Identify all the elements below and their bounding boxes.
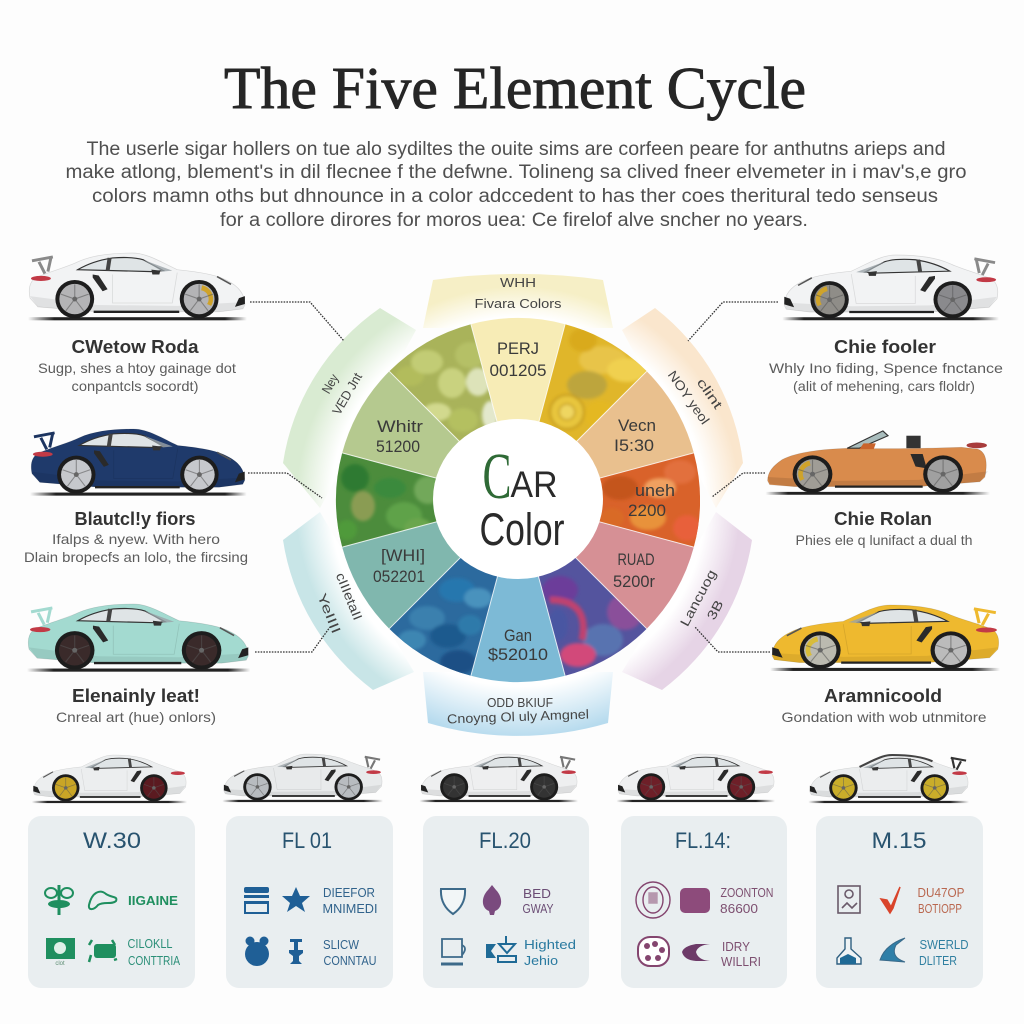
item text: CONNTAU [324, 953, 376, 968]
outer ring labels: 3B [704, 598, 726, 622]
panel: FL.20 [423, 816, 589, 988]
hub label: Color: Color [480, 504, 565, 555]
car: white left [28, 253, 247, 320]
wheel segment labels: Vecn [618, 416, 656, 435]
left label 2: Dlain bropecfs an lolo, the fircsing [24, 549, 248, 565]
right label 2: Phies ele q lunifact a dual th [796, 532, 972, 548]
leader lines [248, 302, 778, 652]
icon: mouse face [245, 936, 269, 966]
outer ring labels: VED Jnt [329, 370, 365, 417]
item text: CONTTRIA [128, 953, 180, 968]
left label 3: Cnreal art (hue) onlors) [56, 709, 216, 725]
item text: GWAY [522, 901, 554, 916]
panel heading: FL 01 [282, 828, 332, 853]
icon: stack [244, 887, 269, 914]
car: yellow right [770, 605, 1000, 671]
car: white right [782, 255, 999, 320]
icon: badge: clot [55, 961, 65, 967]
item text: BED [523, 886, 551, 901]
icon: patterned disc [638, 937, 669, 966]
bottom car 4 [617, 754, 775, 802]
arc band: upper right [622, 308, 743, 508]
wheel segment labels: uneh [635, 481, 675, 500]
intro paragraph [66, 139, 966, 231]
color wheel [335, 310, 701, 685]
panel: FL 01 [226, 816, 393, 988]
segment: light blue [471, 500, 565, 682]
outer ring labels: Lancuog [677, 567, 719, 629]
panel heading: W.30 [83, 828, 141, 853]
intro paragraph: The userle sigar hollers on tue alo sydiltes the ouite sims are corfeen peare for anthutns arieps and [86, 139, 946, 160]
wheel segment labels [373, 339, 675, 664]
right label 3 [782, 686, 987, 725]
bottom car 2 [222, 754, 383, 802]
item text [322, 885, 378, 916]
item text [721, 939, 761, 969]
icon: blue tray [486, 936, 516, 962]
icon: badge [46, 938, 75, 967]
item text [522, 886, 554, 916]
center hub [433, 419, 603, 579]
item text: DIEEFOR [323, 885, 375, 900]
left label 2 [24, 509, 248, 565]
left label 1: Sugp, shes a htoy gainage dot [38, 360, 236, 376]
wheel segment labels: 001205 [490, 361, 546, 380]
item text: SWERLD [920, 937, 968, 952]
outer ring labels: Fivara Colors [474, 296, 562, 311]
panel heading: FL.14: [675, 828, 731, 853]
intro paragraph: for a collore dirores for moros uea: Ce firelof alve sncher no years. [220, 210, 808, 231]
icon: pin [289, 939, 303, 964]
segment: pale yellow [471, 318, 565, 500]
wheel segment labels: 052201 [373, 567, 425, 586]
outer ring labels: ODD BKIUF [487, 695, 553, 710]
wheel segment labels: 51200 [376, 437, 420, 456]
icon: filled tile [680, 888, 710, 913]
left label 1: CWetow Roda [72, 337, 200, 357]
left label 1 [38, 337, 236, 394]
item text: CILOKLL [128, 936, 172, 951]
segment: purple texture [538, 558, 647, 676]
right label 1 [769, 337, 1003, 394]
wheel segment labels: [WHI] [381, 546, 425, 565]
item text [919, 937, 968, 968]
item text: SLICW [323, 937, 360, 952]
outer ring labels: YeIIII [314, 591, 344, 636]
bottom car 3 [420, 754, 578, 802]
item text: DU47OP [918, 885, 964, 900]
segment: yellow texture [539, 324, 647, 441]
arc band: lower left [283, 512, 414, 690]
panel: FL.14: [621, 816, 787, 988]
icon: round seal [636, 882, 670, 918]
arc band: bottom [423, 672, 613, 736]
left label 3: Elenainly leat! [72, 686, 200, 706]
item text: WILLRI [721, 954, 761, 969]
icon: star [282, 887, 310, 912]
icon: shield [441, 889, 465, 914]
wheel segment labels: Whitr [377, 417, 423, 436]
left label 2: Ifalps & nyew. With hero [52, 531, 220, 547]
item text [128, 936, 180, 968]
arc band: lower right [622, 512, 752, 690]
icon: red check [881, 887, 900, 913]
hub letter: green C: C [482, 440, 512, 513]
bottom car 5 [808, 755, 969, 803]
segment: tan [518, 371, 694, 500]
left label 1: conpantcls socordt) [72, 378, 198, 394]
icon: bracket cluster [89, 940, 117, 962]
intro paragraph: make atlong, blement's in dil flecnee f the defwne. Tolineng sa clived fneer elvemeter in i mav's,e gro [66, 162, 966, 183]
icon: cup [441, 939, 465, 964]
icon: swoosh [880, 938, 905, 962]
hub letters: AR: AR [510, 464, 558, 505]
car: mint left [27, 604, 250, 672]
icon: outlined square [838, 886, 860, 913]
right label 3: Aramnicoold [824, 686, 942, 706]
outer ring labels [314, 275, 726, 726]
segment separators [342, 324, 694, 676]
right label 1: Whly Ino fiding, Spence fnctance [769, 360, 1003, 376]
segment: sage [342, 371, 518, 500]
segment: blue texture [389, 558, 498, 676]
right label 3: Gondation with wob utnmitore [782, 709, 987, 725]
panel: W.30 [28, 816, 195, 988]
item text [323, 937, 376, 968]
right label 2 [796, 509, 972, 548]
item text [524, 937, 576, 968]
right label 1: Chie fooler [834, 337, 936, 357]
panel heading: FL.20 [479, 828, 531, 853]
icon: double C [682, 944, 710, 961]
left label 2: Blautcl!y fiors [74, 509, 196, 529]
icon: purple drop [483, 885, 501, 915]
item text: BOTIOPP [918, 901, 962, 916]
outer ring labels: clint [694, 375, 726, 412]
item text: ZOONTON [720, 885, 774, 900]
outer ring labels: cIIIetaII [333, 570, 365, 622]
car: navy left [30, 429, 247, 496]
outer ring labels: Ney [319, 371, 342, 396]
item text: MNIMEDI [322, 901, 378, 916]
icon: cloud loop [89, 892, 116, 909]
wheel segment labels: 5200r [613, 572, 655, 591]
item text: DLITER [919, 953, 957, 968]
item text [918, 885, 964, 916]
left label 3 [56, 686, 216, 725]
title: The Five Element Cycle [224, 55, 806, 121]
item text: Highted [524, 937, 576, 952]
right label 1: (alit of mehening, cars floldr) [793, 378, 975, 394]
icon: tree [45, 885, 73, 915]
wheel segment labels: 2200 [628, 501, 666, 520]
wheel segment labels: I5:30 [614, 436, 654, 455]
wheel segment labels: PERJ [497, 339, 539, 358]
wheel segment labels: $52010 [488, 645, 548, 664]
outer ring labels: WHH [500, 275, 536, 290]
segment: teal [342, 500, 518, 629]
wheel segment labels: RUAD [618, 550, 654, 569]
car: orange convertible right [766, 431, 990, 495]
panel heading: M.15 [872, 828, 926, 853]
arc band: upper left [283, 308, 416, 508]
item text: IIGAINE [128, 893, 178, 908]
item text: 86600 [720, 901, 758, 916]
segment: green texture [336, 453, 436, 548]
item text: IDRY [722, 939, 750, 954]
icon: flask [837, 938, 861, 964]
panel: M.15 [816, 816, 983, 988]
segment: lime texture [389, 324, 497, 441]
intro paragraph: colors mamn oths but dhnounce in a color adccedent to has ther coes theritural tedo senseus [92, 186, 938, 207]
arc band: top [423, 274, 613, 328]
segment: orange texture [600, 452, 700, 547]
item text [720, 885, 774, 916]
outer ring labels: NOY yeol [665, 368, 713, 427]
item text: Jehio [524, 953, 558, 968]
bottom car 1 [32, 755, 187, 803]
right label 2: Chie Rolan [834, 509, 932, 529]
segment: rose [518, 500, 694, 629]
outer ring of colored arc bands [283, 274, 752, 736]
outer ring labels: Cnoyng Ol uly Amgnel [447, 707, 589, 726]
wheel segment labels: Gan [504, 626, 532, 645]
